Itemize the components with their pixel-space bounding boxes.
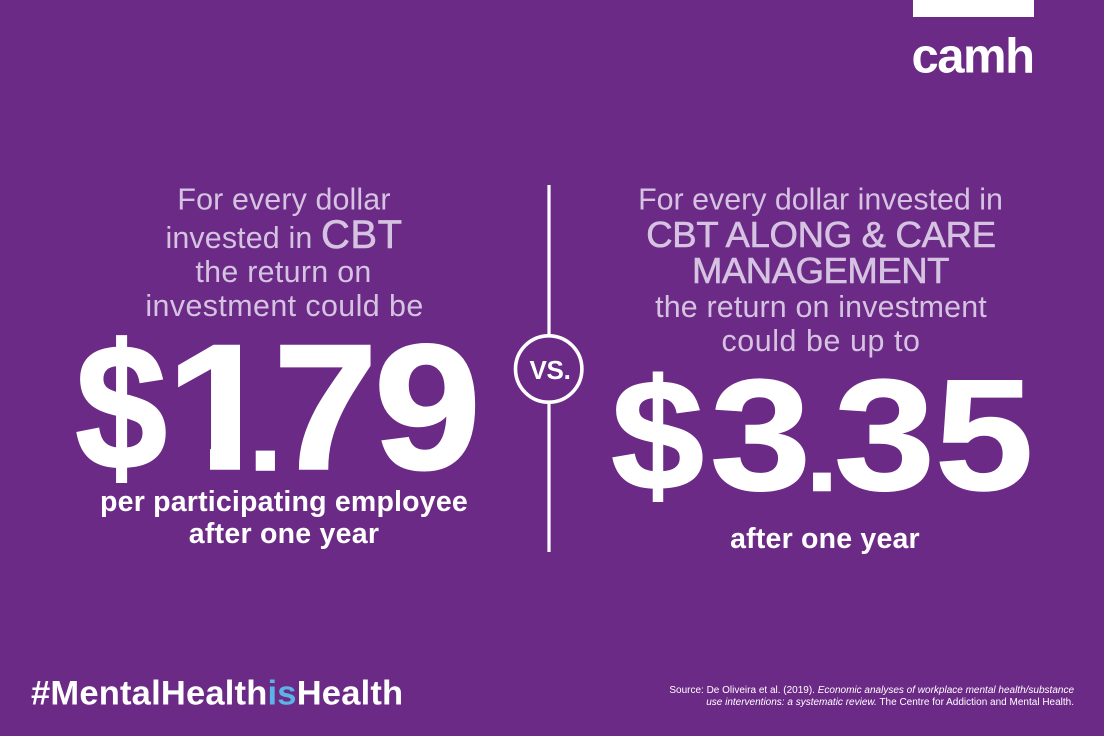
big number: $3.35: $ bbox=[611, 348, 704, 523]
big number: $1.79: $ bbox=[76, 308, 167, 507]
panel: CBT alone bbox=[76, 182, 481, 550]
intro text: care management: the return on investment bbox=[655, 290, 987, 324]
intro text: care management bbox=[638, 182, 1003, 358]
big number: $1.79 bbox=[76, 335, 476, 483]
logo: camh bbox=[912, 0, 1034, 84]
source citation bbox=[669, 685, 1074, 708]
intro text: care management: For every dollar invested in bbox=[638, 182, 1003, 216]
caption: per participating employee bbox=[100, 486, 468, 550]
big number: $1.79: 9 bbox=[374, 308, 481, 507]
hashtag: #MentalHealthisHealth bbox=[31, 674, 403, 712]
intro text: care management: could be up to bbox=[722, 324, 920, 358]
intro text: CBT: For every dollar bbox=[177, 182, 391, 216]
intro text: CBT bbox=[145, 182, 424, 323]
source citation: use interventions: a systematic review. The Centre for Addiction and Mental Health. bbox=[706, 697, 1074, 708]
big number: $1.79: . bbox=[249, 364, 282, 496]
caption: per participating employee: per participating employee bbox=[100, 486, 468, 518]
big number: $3.35: 3 bbox=[834, 348, 935, 524]
big number: $1.79: 7 bbox=[274, 308, 377, 507]
panel: CBT along and care management bbox=[611, 182, 1033, 555]
divider with VS. badge bbox=[516, 185, 582, 552]
logo: camh: camh bbox=[912, 30, 1034, 84]
intro text: CBT: investment could be bbox=[145, 289, 424, 323]
big number: $3.35: 5 bbox=[935, 346, 1033, 523]
intro text: CBT: invested in CBT bbox=[165, 213, 403, 257]
divider with VS. badge: VS. bbox=[529, 355, 571, 385]
intro text: care management: CBT ALONG & CARE bbox=[646, 214, 996, 255]
caption: per participating employee: after one year bbox=[189, 518, 379, 550]
source citation: Source: De Oliveira et al. (2019). Economic analyses of workplace mental health/substance bbox=[669, 685, 1074, 696]
intro text: care management: MANAGEMENT bbox=[692, 250, 949, 291]
big number: $3.35 bbox=[611, 346, 1033, 524]
big number: $3.35: 3 bbox=[710, 348, 811, 524]
intro text: CBT: the return on bbox=[195, 255, 372, 289]
big number: $3.35: . bbox=[806, 388, 838, 516]
caption: after one year: after one year bbox=[730, 523, 920, 555]
big number: $1.79: 1 bbox=[166, 308, 277, 507]
